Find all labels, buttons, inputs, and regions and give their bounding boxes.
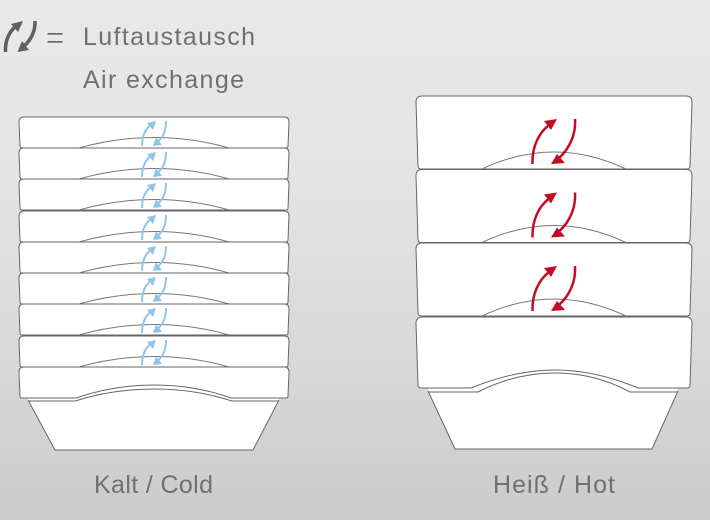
cold bowl base <box>28 380 279 450</box>
hot bottom rim with arch <box>416 317 692 388</box>
hot bowl base <box>428 370 678 449</box>
label: Kalt / Cold: Kalt / Cold <box>94 471 213 499</box>
cold base inner arch line <box>29 389 279 401</box>
cold air-exchange arrows (blue) <box>142 121 166 365</box>
hot stack: four bowls, wider spacing <box>416 96 692 449</box>
label: Heiß / Hot: Heiß / Hot <box>493 471 615 499</box>
legend text: Air exchange: Air exchange <box>83 66 244 94</box>
legend icon: air exchange arrows <box>5 21 35 52</box>
cold bottom rim with arch <box>19 367 289 398</box>
cold stack: nine nested bowls <box>19 117 289 450</box>
hot air-exchange arrows (red) <box>532 119 575 311</box>
hot base inner arch line <box>428 373 678 392</box>
legend equals sign <box>48 33 62 43</box>
legend text: Luftaustausch: Luftaustausch <box>83 23 255 51</box>
